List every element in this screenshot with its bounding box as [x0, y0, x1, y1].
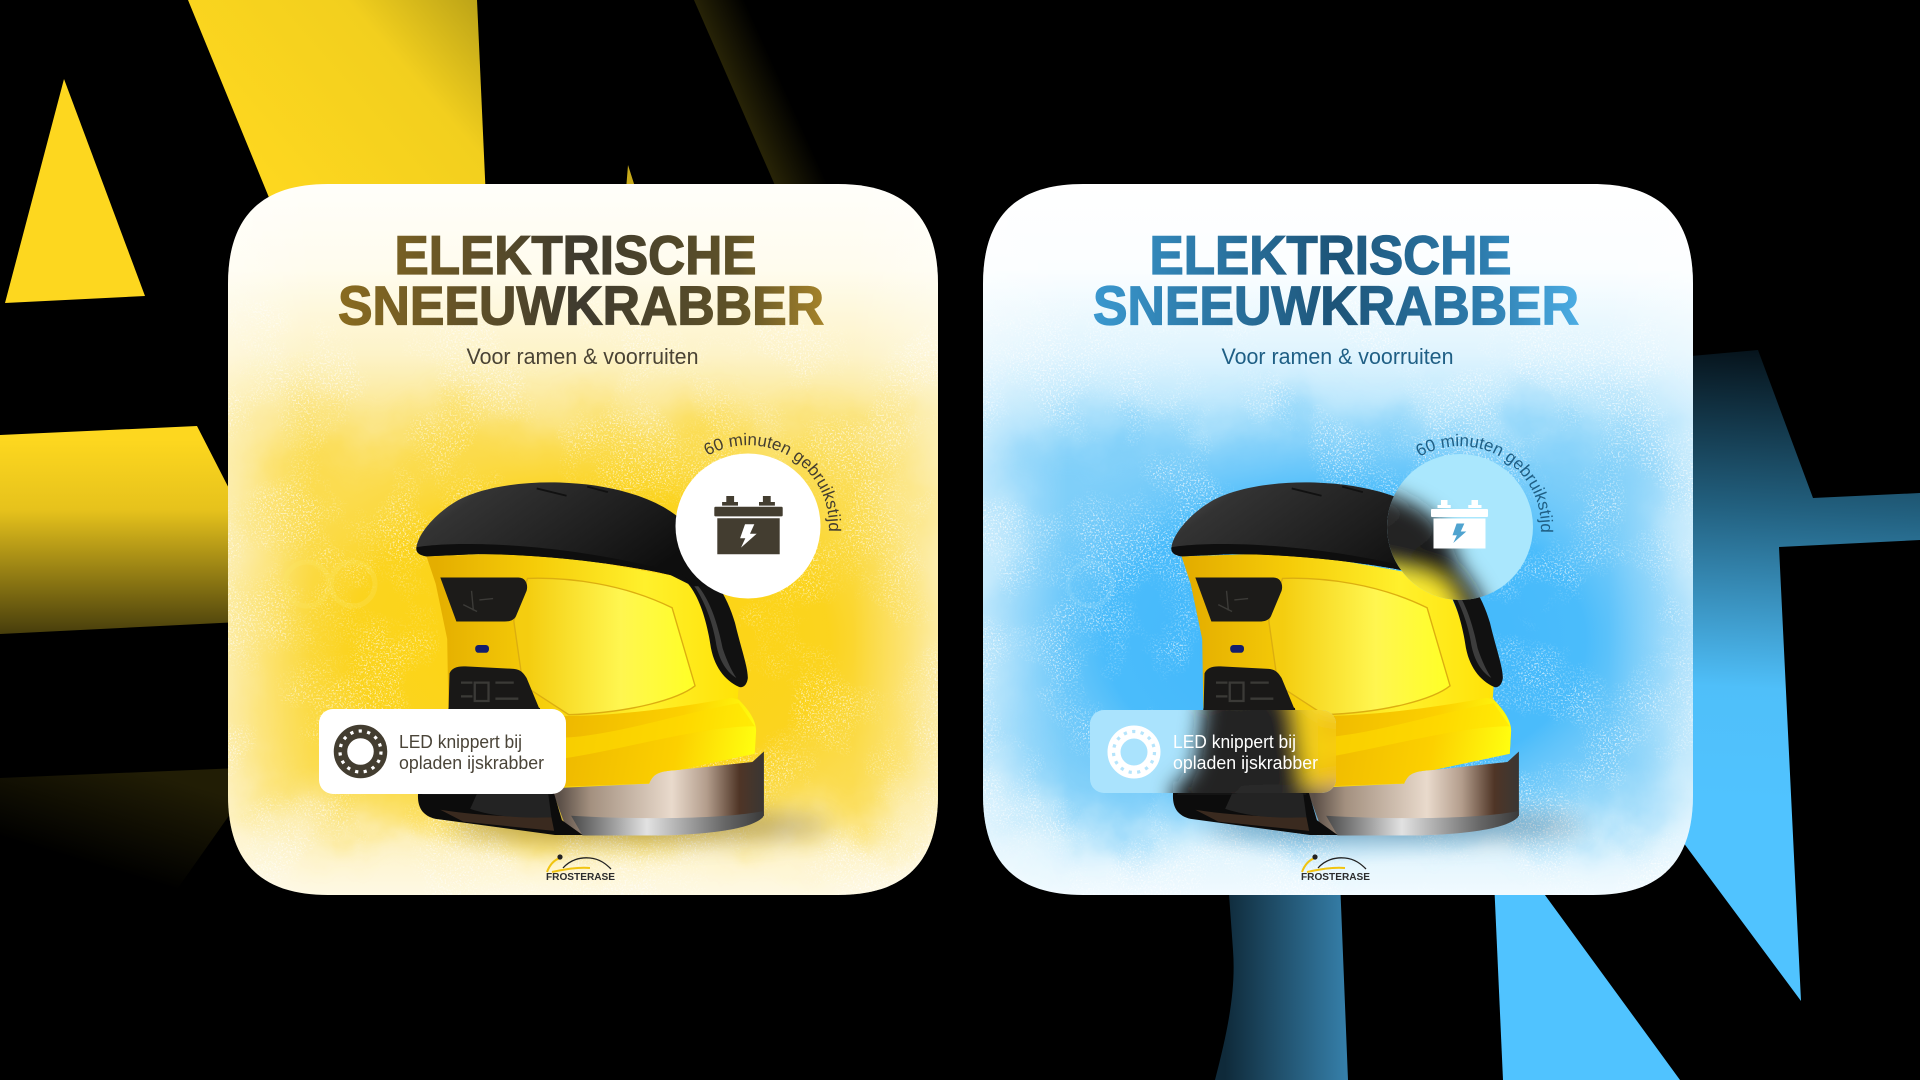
card surface yellow — [220, 184, 960, 895]
icon: battery — [1431, 500, 1488, 548]
title — [338, 224, 824, 336]
background shape: yellow middle band — [0, 426, 240, 634]
background shape: yellow triangle — [5, 79, 145, 303]
badge: frosted battery runtime: 60 minuten gebruikstijd — [1416, 434, 1554, 532]
subtitle: Voor ramen & voorruiten — [466, 344, 698, 369]
title: SNEEUWKRABBER — [1093, 274, 1579, 336]
callout: frosted LED: LED knippert bij — [1173, 732, 1296, 752]
callout: frosted LED: opladen ijskrabber — [1173, 753, 1318, 773]
panel: blue product card — [983, 184, 1693, 895]
logo: Frosterase — [546, 854, 615, 883]
logo: Frosterase — [1301, 854, 1370, 883]
logo: Frosterase: FROSTERASE — [546, 871, 615, 883]
title: ELEKTRISCHE — [394, 224, 756, 286]
card surface blue — [975, 184, 1715, 895]
badge: frosted battery runtime — [1387, 434, 1554, 600]
background shape: yellow top slab — [188, 0, 486, 200]
background shape: small wedge — [626, 165, 636, 190]
panel: yellow product card — [228, 184, 938, 895]
background shape: blue lower left leg — [1215, 880, 1348, 1080]
subtitle: Voor ramen & voorruiten — [1222, 344, 1454, 369]
callout: LED: opladen ijskrabber — [399, 753, 544, 773]
title — [1093, 224, 1579, 336]
callout: LED: LED knippert bij — [399, 732, 522, 752]
background shape: blue right figure — [1680, 350, 1920, 1001]
background shape: dark yellow lower band — [0, 768, 240, 900]
title: SNEEUWKRABBER — [338, 274, 824, 336]
background shape: dark top wedge — [694, 0, 830, 190]
icon: battery — [714, 496, 783, 554]
callout: frosted LED — [1090, 710, 1336, 793]
icon: LED ring — [1114, 732, 1154, 772]
title: ELEKTRISCHE — [1150, 224, 1512, 286]
logo: Frosterase: FROSTERASE — [1301, 871, 1370, 883]
icon: LED ring — [340, 731, 381, 772]
callout: LED — [319, 709, 566, 794]
product: electric ice scraper — [1171, 482, 1519, 835]
badge: battery runtime: 60 minuten gebruikstijd — [704, 432, 842, 531]
product: electric ice scraper — [416, 482, 764, 835]
badge: battery runtime — [676, 432, 842, 598]
background shape: blue lower right leg — [1494, 880, 1680, 1080]
